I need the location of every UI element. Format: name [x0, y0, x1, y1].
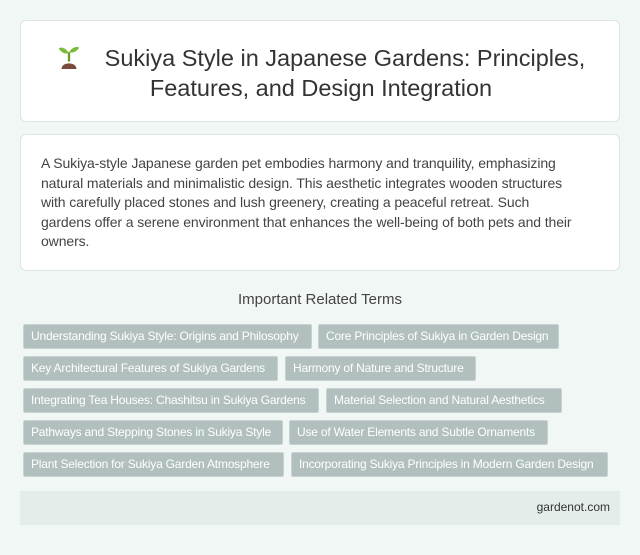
icon: sprout — [58, 47, 80, 69]
title: Sukiya Style in Japanese Gardens: Principles, — [105, 45, 585, 71]
tag 4: Harmony of Nature and Structure — [293, 361, 464, 375]
tag 7: Pathways and Stepping Stones in Sukiya Style — [31, 425, 271, 439]
tag 8: Use of Water Elements and Subtle Ornaments — [297, 425, 535, 439]
summary paragraph: owners. — [41, 233, 89, 249]
tag 6 — [326, 388, 562, 413]
tag 5: Integrating Tea Houses: Chashitsu in Sukiya Gardens — [31, 393, 305, 407]
tag 10: Incorporating Sukiya Principles in Modern Garden Design — [299, 457, 594, 471]
summary paragraph: natural materials and minimalistic design. This aesthetic integrates wooden structures — [41, 174, 562, 190]
tag 7 — [23, 420, 283, 445]
tag 9: Plant Selection for Sukiya Garden Atmosphere — [31, 457, 270, 471]
summary text card — [20, 134, 620, 271]
tag 4 — [285, 356, 476, 381]
summary paragraph — [41, 155, 572, 249]
title: Features, and Design Integration — [150, 75, 492, 101]
tag 3: Key Architectural Features of Sukiya Gardens — [31, 361, 265, 375]
title card — [20, 20, 620, 122]
summary paragraph: gardens offer a serene environment that enhances the well-being of both pets and their — [41, 214, 572, 230]
summary paragraph: A Sukiya-style Japanese garden pet embodies harmony and tranquility, emphasizing — [41, 155, 556, 171]
tag 8 — [289, 420, 548, 445]
tag 1: Understanding Sukiya Style: Origins and Philosophy — [31, 329, 298, 343]
footer text: gardenot.com — [537, 500, 610, 514]
tag 10 — [291, 452, 608, 477]
tag 9 — [23, 452, 284, 477]
tag 2: Core Principles of Sukiya in Garden Design — [326, 329, 548, 343]
tag 6: Material Selection and Natural Aesthetics — [334, 393, 545, 407]
tag 1 — [23, 324, 312, 349]
tag 3 — [23, 356, 278, 381]
tag 2 — [318, 324, 559, 349]
summary paragraph: with carefully placed stones and lush greenery, creating a peaceful retreat. Such — [41, 194, 529, 210]
footer — [20, 491, 620, 525]
tag 5 — [23, 388, 319, 413]
title — [58, 45, 585, 101]
heading: Important Related Terms: Important Related Terms — [238, 291, 402, 308]
